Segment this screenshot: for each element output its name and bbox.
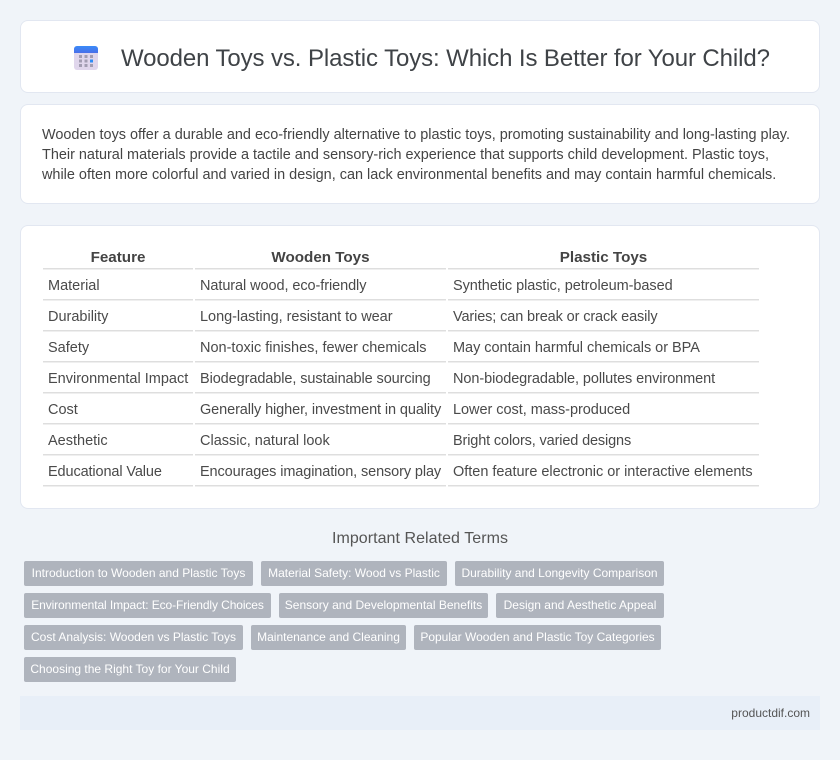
comparison table: Safety — [48, 340, 89, 356]
comparison table: Natural wood, eco-friendly — [200, 278, 366, 294]
comparison table: Lower cost, mass-produced — [453, 402, 630, 418]
related term tags: Choosing the Right Toy for Your Child — [30, 662, 230, 676]
text block: introduction: while often more colorful and varied in design, can lack environmental benefits and may contain harmful chemicals. — [42, 167, 776, 183]
related term tags: Durability and Longevity Comparison — [461, 566, 658, 580]
comparison table: Encourages imagination, sensory play — [200, 464, 441, 480]
comparison table: Durability — [48, 309, 108, 325]
comparison table: Long-lasting, resistant to wear — [200, 309, 393, 325]
comparison table: Cost — [48, 402, 78, 418]
comparison table: Synthetic plastic, petroleum-based — [453, 278, 673, 294]
comparison table: Aesthetic — [48, 433, 108, 449]
panel: introduction — [20, 104, 820, 204]
related term tags: Design and Aesthetic Appeal — [504, 598, 656, 612]
comparison table: Bright colors, varied designs — [453, 433, 631, 449]
comparison table: Non-biodegradable, pollutes environment — [453, 371, 715, 387]
comparison table: Varies; can break or crack easily — [453, 309, 658, 325]
related term tags: Maintenance and Cleaning — [257, 630, 400, 644]
footer bar — [20, 696, 820, 730]
icon: calendar — [74, 46, 98, 70]
comparison table: Material — [48, 278, 100, 294]
comparison table: Feature — [91, 249, 145, 266]
text block: introduction: Their natural materials provide a tactile and sensory-rich experience that supports child development. Plastic toys, — [42, 147, 769, 163]
footer source text: productdif.com — [731, 706, 810, 720]
text block: introduction: Wooden toys offer a durable and eco-friendly alternative to plastic toys, promoting sustainability and long-lasting play. — [42, 127, 790, 143]
comparison table: Plastic Toys — [560, 249, 647, 266]
related term tags: Material Safety: Wood vs Plastic — [268, 566, 440, 580]
comparison table: Non-toxic finishes, fewer chemicals — [200, 340, 426, 356]
related term tags: Environmental Impact: Eco-Friendly Choices — [31, 598, 264, 612]
comparison table: Wooden Toys — [271, 249, 370, 266]
panel: comparison table — [20, 225, 820, 509]
comparison table — [43, 249, 759, 487]
heading: related terms: Important Related Terms — [332, 530, 508, 547]
comparison table: Generally higher, investment in quality — [200, 402, 441, 418]
comparison table: May contain harmful chemicals or BPA — [453, 340, 700, 356]
comparison table: Classic, natural look — [200, 433, 330, 449]
related term tags: Sensory and Developmental Benefits — [285, 598, 482, 612]
related term tags: Introduction to Wooden and Plastic Toys — [32, 566, 245, 580]
related term tags: Popular Wooden and Plastic Toy Categories — [420, 630, 655, 644]
text block: introduction — [42, 127, 790, 183]
panel: header — [20, 20, 820, 93]
title: Wooden Toys vs. Plastic Toys: Which Is Better for Your Child? — [121, 45, 770, 72]
comparison table: Environmental Impact — [48, 371, 188, 387]
comparison table: Biodegradable, sustainable sourcing — [200, 371, 431, 387]
comparison table: Educational Value — [48, 464, 162, 480]
comparison table: Often feature electronic or interactive elements — [453, 464, 753, 480]
related term tags: Cost Analysis: Wooden vs Plastic Toys — [31, 630, 236, 644]
